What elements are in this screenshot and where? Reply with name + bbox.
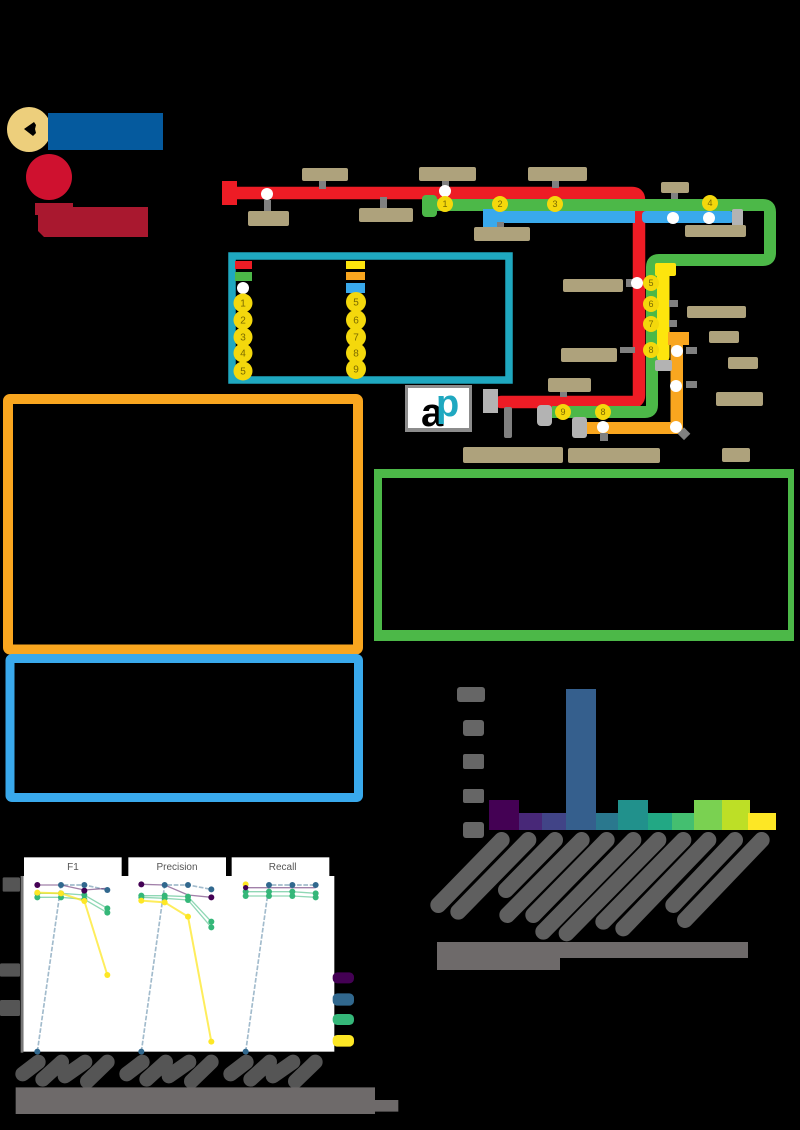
series: blue dashed xyxy=(37,885,316,1052)
plot background xyxy=(23,876,334,1052)
strip: Recall xyxy=(232,857,329,876)
legend station numbers: 6 xyxy=(353,316,359,326)
metro map xyxy=(222,167,770,463)
legend station numbers: 8 xyxy=(353,348,359,360)
logo: dark red wordmark bar xyxy=(35,203,148,237)
blue line xyxy=(483,209,734,228)
white stations xyxy=(261,185,715,433)
panel: metro legend xyxy=(232,256,509,380)
slanted x axis labels xyxy=(438,840,762,933)
legend station numbers: 5 xyxy=(353,298,359,308)
bar chart caption xyxy=(437,942,748,970)
strip: F1: F1 xyxy=(67,862,79,873)
logo: ap badge: a xyxy=(421,391,444,435)
legend line swatches xyxy=(235,261,365,294)
numbered yellow stations: 8 xyxy=(648,345,654,355)
panel: orange frame xyxy=(8,399,358,650)
series: purple xyxy=(37,884,316,897)
legend station numbers xyxy=(234,292,366,380)
logo: ap badge xyxy=(405,383,472,435)
legend station numbers: 1 xyxy=(240,298,246,310)
line chart xyxy=(0,857,398,1114)
numbered yellow stations: 3 xyxy=(552,199,558,209)
green line xyxy=(430,205,770,412)
panel: green frame xyxy=(374,469,794,641)
logo: ap badge: p xyxy=(436,383,459,425)
strip: F1 xyxy=(24,857,122,876)
legend station numbers: 3 xyxy=(240,332,246,344)
y axis labels xyxy=(457,687,485,838)
numbered yellow stations: 4 xyxy=(707,198,713,208)
y axis tick labels xyxy=(0,877,20,1016)
bars xyxy=(489,689,776,830)
legend station numbers: 7 xyxy=(353,332,359,344)
strip: Precision: Precision xyxy=(156,862,198,873)
x axis tick labels xyxy=(23,1062,315,1081)
legend station numbers: 9 xyxy=(353,364,359,376)
terminal blocks xyxy=(483,209,743,438)
numbered yellow stations: 6 xyxy=(648,299,654,309)
numbered yellow stations: 9 xyxy=(560,407,566,417)
logo group: institutions xyxy=(7,107,163,237)
strip: Recall: Recall xyxy=(269,862,297,873)
legend station numbers: 5 xyxy=(240,366,246,378)
legend station numbers: 4 xyxy=(240,348,246,360)
y axis rule xyxy=(21,876,23,1053)
numbered yellow stations: 5 xyxy=(648,278,654,288)
green line terminal xyxy=(422,195,437,217)
legend station numbers: 2 xyxy=(240,316,246,326)
panel: blue frame xyxy=(10,658,358,798)
numbered yellow stations: 8 xyxy=(600,407,606,417)
station connector ticks xyxy=(264,178,697,441)
legend frame xyxy=(232,256,509,380)
icon: gold circle xyxy=(7,107,51,152)
series: yellow xyxy=(37,893,211,1042)
numbered yellow stations: 1 xyxy=(442,199,448,209)
line chart caption xyxy=(16,1087,398,1114)
bar chart xyxy=(438,687,776,933)
series: green xyxy=(37,892,316,927)
numbered yellow stations: 2 xyxy=(497,199,503,209)
orange line xyxy=(585,332,689,434)
strip: Precision xyxy=(128,857,226,876)
chart legend xyxy=(333,972,354,1047)
numbered yellow stations xyxy=(437,195,718,420)
yellow line xyxy=(655,263,676,362)
station name plates xyxy=(248,167,763,463)
logo: blue wordmark bar xyxy=(48,113,163,150)
markers xyxy=(34,881,319,1055)
numbered yellow stations: 7 xyxy=(648,319,654,329)
icon: red circle xyxy=(26,154,72,200)
red line xyxy=(222,181,639,402)
